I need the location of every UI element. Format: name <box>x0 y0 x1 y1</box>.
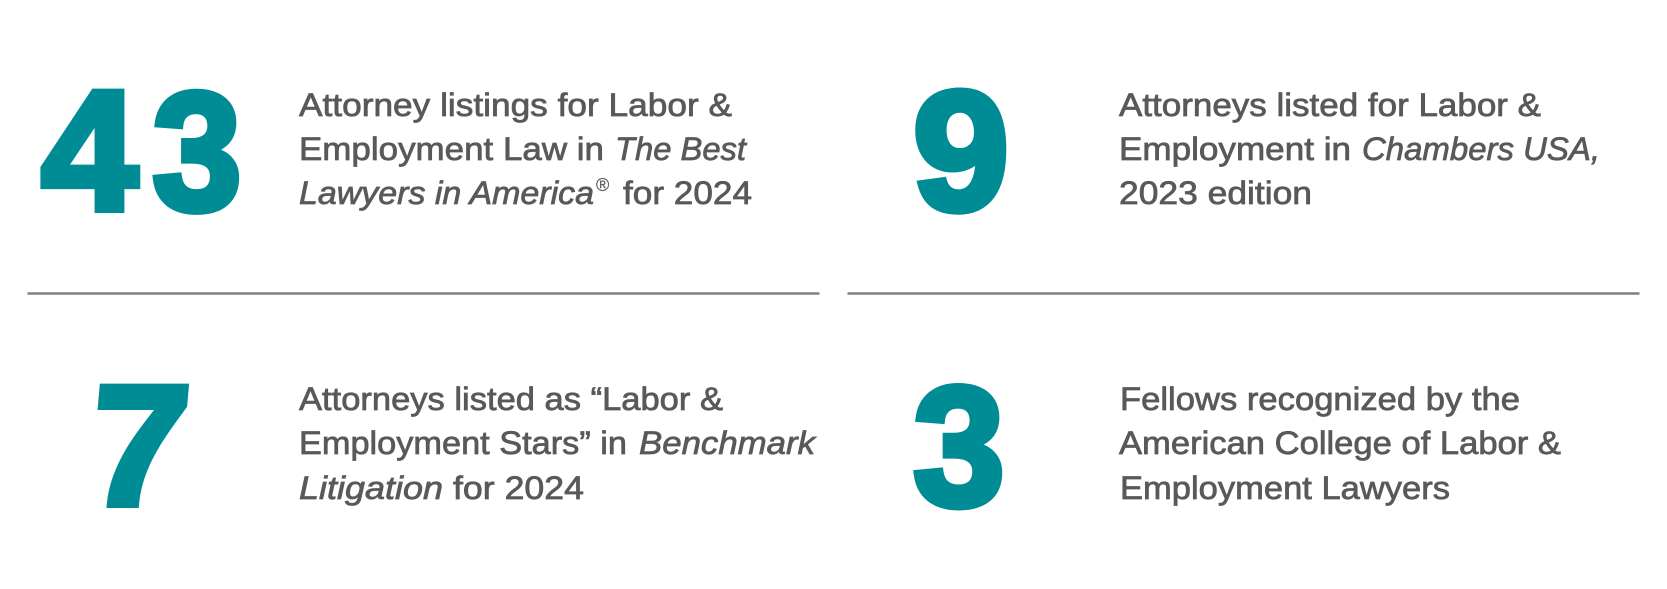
text: Best Lawyers description: Employment Law in <box>299 131 604 167</box>
number: 43 <box>41 56 242 246</box>
text: Best Lawyers description: Lawyers in America <box>299 175 594 211</box>
panel: 43 attorney listings <box>41 56 752 246</box>
panel: 3 fellows <box>913 353 1561 542</box>
text: Chambers USA description: Employment in <box>1119 131 1351 167</box>
number: 43: 3 <box>152 57 242 245</box>
text: Best Lawyers description: The Best <box>615 131 748 167</box>
number: 43: 4 <box>41 56 138 246</box>
text: Fellows description: Employment Lawyers <box>1120 470 1450 506</box>
text: Fellows description <box>1119 381 1561 506</box>
text: Fellows description: Fellows recognized by the <box>1120 381 1520 417</box>
text: Fellows description: American College of Labor & <box>1119 425 1561 461</box>
text: Chambers USA description <box>1119 87 1600 211</box>
panel: 9 attorneys in Chambers USA <box>913 57 1600 246</box>
text: Benchmark Litigation description: Benchmark <box>639 425 817 461</box>
text: Chambers USA description: Chambers USA, <box>1362 131 1600 167</box>
text: Benchmark Litigation description: Employment Stars” in <box>299 425 627 461</box>
text: Best Lawyers description <box>299 87 752 211</box>
number: 3: 3 <box>913 353 1005 542</box>
number: 9: 9 <box>913 57 1009 246</box>
text: Chambers USA description: Attorneys listed for Labor & <box>1119 87 1541 123</box>
text: Best Lawyers description: for 2024 <box>623 175 752 211</box>
panel: 7 Labor & Employment Stars <box>82 350 817 541</box>
number: 7: 7 <box>82 350 196 541</box>
text: Benchmark Litigation description: for 2024 <box>453 470 584 506</box>
text: Best Lawyers description: ® <box>596 175 609 195</box>
text: Best Lawyers description: Attorney listings for Labor & <box>299 87 732 123</box>
text: Chambers USA description: 2023 edition <box>1119 175 1312 211</box>
text: Benchmark Litigation description <box>299 381 817 506</box>
text: Benchmark Litigation description: Attorneys listed as “Labor & <box>299 381 723 417</box>
text: Benchmark Litigation description: Litigation <box>299 470 443 506</box>
